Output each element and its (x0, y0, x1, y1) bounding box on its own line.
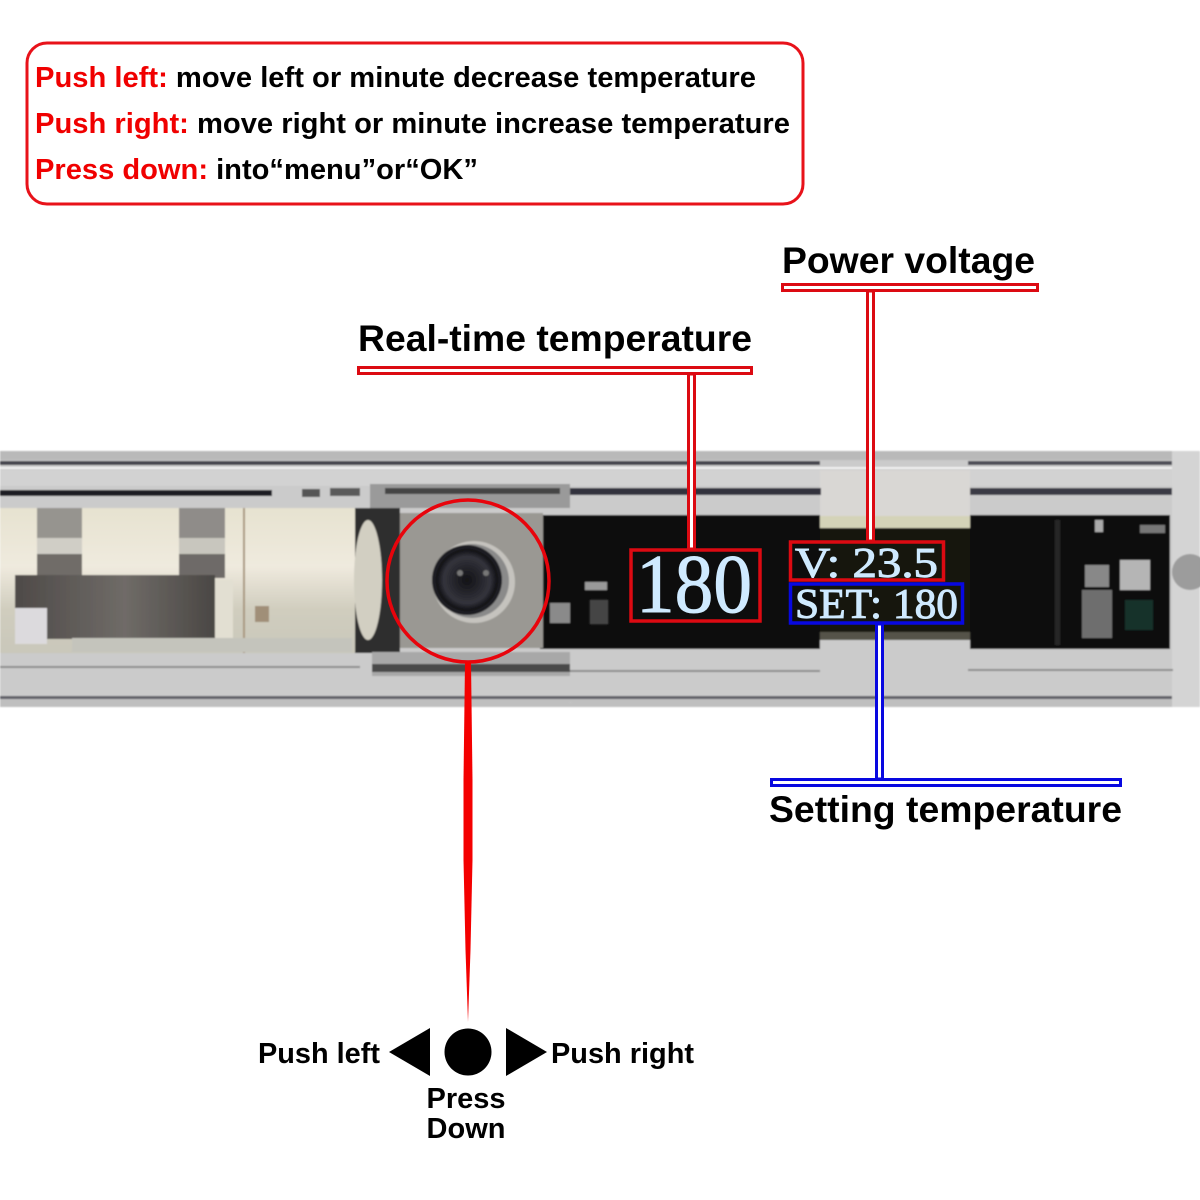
highlight: voltage box (790, 542, 944, 580)
highlight: real-time temperature box (631, 550, 760, 621)
callout: real-time temperature: Real-time temperature (358, 318, 752, 359)
callout: power voltage (782, 240, 1038, 541)
instruction box (27, 43, 803, 204)
device photo: soldering iron body (0, 451, 1200, 707)
callout: setting temperature: Setting temperature (769, 789, 1122, 830)
highlight: joystick circle (387, 500, 549, 662)
callout: power voltage: Power voltage (782, 240, 1035, 281)
label: push left: Push left (258, 1038, 380, 1070)
joystick switch (370, 484, 570, 676)
callout: setting temperature (769, 624, 1122, 830)
pcb and screen (540, 515, 1200, 649)
callout: real-time temperature (358, 318, 752, 549)
icon: left triangle (389, 1028, 430, 1076)
label: press down: Press (426, 1083, 506, 1115)
screen readout: voltage value: V: 23.5 (795, 541, 938, 587)
instruction: push left: Push left: move left or minute decrease temperature (35, 62, 756, 94)
instruction: press down: Press down: into“menu”or“OK” (35, 154, 478, 186)
legend: joystick directions (258, 1028, 694, 1145)
icon: press circle (444, 1028, 492, 1076)
highlight: set temperature box (790, 584, 962, 623)
label: press down: Down (427, 1113, 505, 1145)
icon: right triangle (506, 1028, 547, 1076)
arrow: needle from joystick to legend (464, 662, 472, 1022)
screen readout: set temperature value: SET: 180 (795, 582, 958, 628)
label: push right: Push right (551, 1038, 694, 1070)
battery (0, 508, 360, 653)
instruction: push right: Push right: move right or minute increase temperature (35, 108, 790, 140)
screen readout: real-time temperature value: 180 (636, 538, 752, 631)
